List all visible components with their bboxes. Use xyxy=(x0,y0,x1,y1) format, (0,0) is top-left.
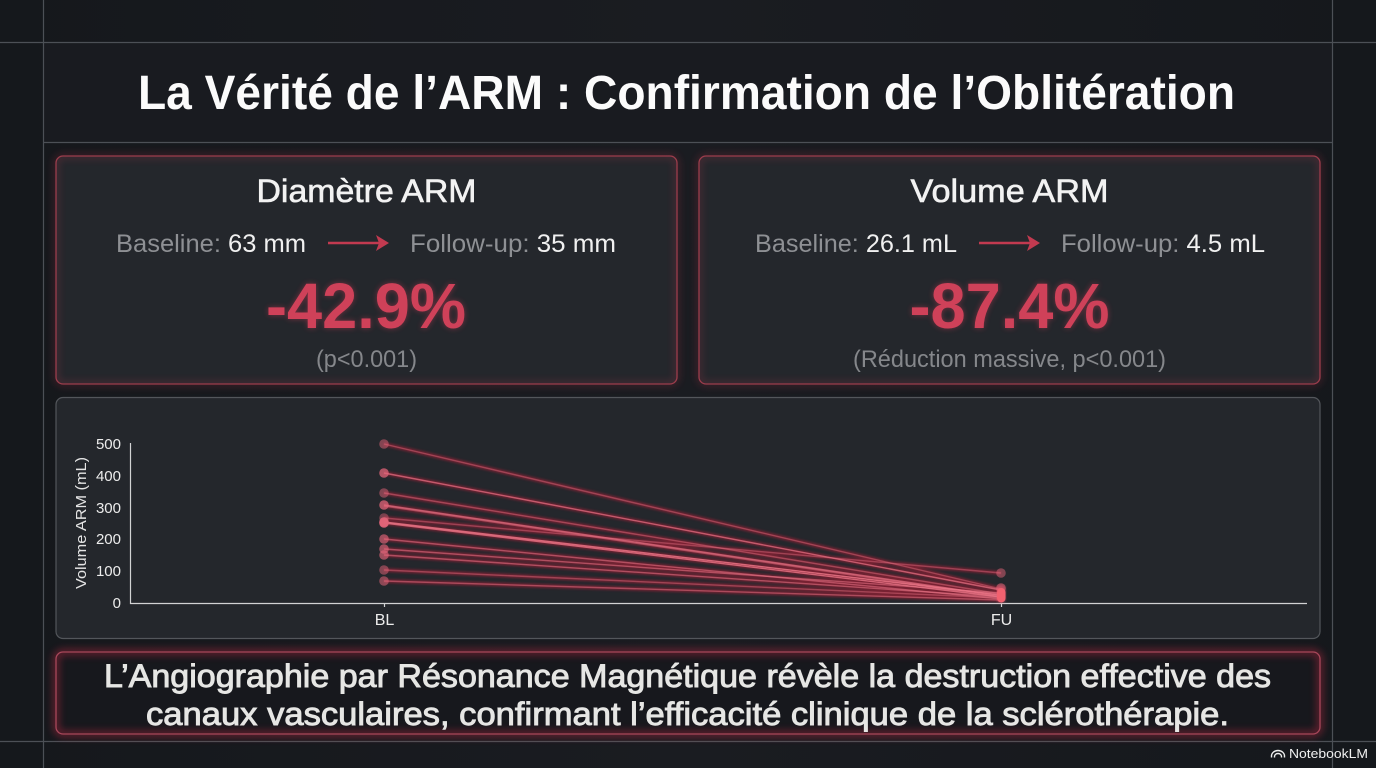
y axis ticks: 200 xyxy=(96,531,121,548)
follow-up value: Follow-up: 35 mm xyxy=(410,230,616,258)
arrow xyxy=(328,235,389,251)
x axis labels: FU xyxy=(991,612,1012,629)
percent change: -87.4% xyxy=(910,270,1110,342)
panel: line chart xyxy=(56,398,1320,638)
y axis ticks: 400 xyxy=(96,468,121,485)
percent change: -42.9% xyxy=(266,270,466,342)
percent change: -42.9% xyxy=(266,270,466,342)
arrow xyxy=(979,235,1040,251)
axes xyxy=(130,443,1307,607)
p value: (Réduction massive, p<0.001) xyxy=(853,346,1166,373)
y axis ticks: 100 xyxy=(96,563,121,580)
panel: conclusion callout xyxy=(56,652,1320,734)
x axis labels: BL xyxy=(375,612,394,629)
panel: volume ARM xyxy=(699,156,1320,384)
p value: (p<0.001) xyxy=(316,346,417,373)
paired lines xyxy=(384,444,1001,600)
paired lines glow xyxy=(384,444,1001,600)
x axis labels xyxy=(375,612,1012,629)
icon: NotebookLM logo xyxy=(1272,750,1284,758)
baseline points xyxy=(379,439,389,586)
conclusion text: canaux vasculaires, confirmant l’efficacité clinique de la sclérothérapie. xyxy=(146,696,1229,732)
conclusion text: L’Angiographie par Résonance Magnétique révèle la destruction effective des xyxy=(104,658,1271,694)
title: La Vérité de l’ARM : Confirmation de l’Oblitération xyxy=(138,67,1235,120)
baseline value: Baseline: 26.1 mL xyxy=(755,230,957,258)
percent change: -87.4% xyxy=(910,270,1110,342)
y axis ticks: 500 xyxy=(96,436,121,453)
y axis ticks: 300 xyxy=(96,500,121,517)
follow-up points xyxy=(996,568,1006,603)
heading: diamètre: Diamètre ARM xyxy=(256,173,476,209)
y axis ticks: 0 xyxy=(113,595,121,612)
y axis ticks xyxy=(96,436,121,612)
baseline value: Baseline: 63 mm xyxy=(116,230,306,258)
heading: volume: Volume ARM xyxy=(910,173,1108,209)
y axis label: Volume ARM (mL) xyxy=(73,457,90,589)
watermark: NotebookLM: NotebookLM xyxy=(1289,746,1368,761)
panel: diamètre ARM xyxy=(56,156,677,384)
follow-up value: Follow-up: 4.5 mL xyxy=(1061,230,1265,258)
